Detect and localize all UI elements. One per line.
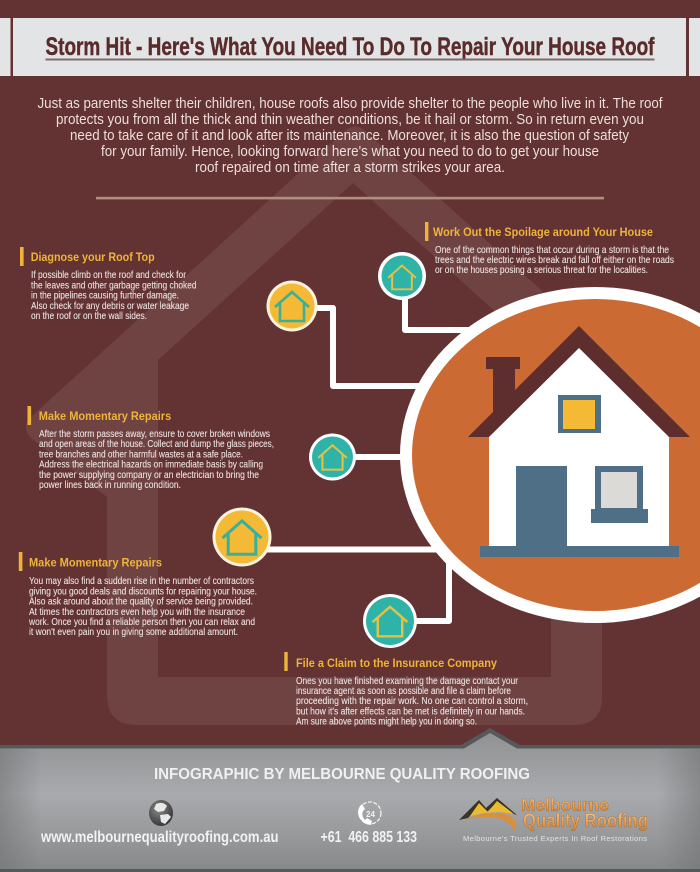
panel: make momentary repairs, second: You may also find a sudden rise in the number of contractors xyxy=(29,576,254,587)
panel: file a claim: proceeding with the repair work. No one can control a storm, xyxy=(296,696,528,707)
panel: diagnose your roof top xyxy=(20,247,197,322)
walls xyxy=(489,348,669,546)
icon: teal house top xyxy=(378,252,426,300)
panel: file a claim: but how it's after effects can be met is definitely in our hands. xyxy=(296,706,525,717)
footer heading: INFOGRAPHIC BY MELBOURNE QUALITY ROOFING xyxy=(154,766,530,783)
roof xyxy=(468,326,690,437)
intro paragraph: roof repaired on time after a storm strikes your area. xyxy=(195,159,505,176)
lower window xyxy=(595,466,643,510)
panel: make momentary repairs, second: work. Once you find a reliable person then you can relax and xyxy=(28,617,255,628)
panel: make momentary repairs, first: and open areas of the house. Collect and dump the glass pieces, xyxy=(39,439,274,450)
panel: file a claim: insurance agent as soon as possible and file a claim before xyxy=(296,686,511,697)
panel: make momentary repairs, second: it won't even pain you in giving some additional amount. xyxy=(29,627,238,638)
intro paragraph: for your family. Hence, looking forward here's what you need to do to get your house xyxy=(101,143,599,160)
panel: file a claim: Am sure above points might help you in doing so. xyxy=(296,716,477,727)
ghost house watermark xyxy=(26,126,602,725)
panel: diagnose your roof top: Also check for any debris or water leakage xyxy=(31,301,189,312)
panel: work out the spoilage: or on the houses posing a serious threat for the localities. xyxy=(435,265,648,276)
panel: make momentary repairs, second xyxy=(19,552,257,638)
panel: diagnose your roof top: in the pipelines causing further damage. xyxy=(31,291,179,302)
intro paragraph xyxy=(38,95,663,176)
logo: melbourne quality roofing: Quality Roofing xyxy=(523,811,648,832)
logo: melbourne quality roofing xyxy=(459,795,648,843)
panel: diagnose your roof top: If possible climb on the roof and check for xyxy=(31,270,186,281)
panel: file a claim: Ones you have finished examining the damage contact your xyxy=(296,676,518,687)
website: www.melbournequalityroofing.com.au xyxy=(40,829,278,846)
intro paragraph: protects you from all the thick and thin weather conditions, be it hail or storm. So in return even you xyxy=(56,111,644,128)
icon: phone 24 xyxy=(358,802,381,825)
icon: teal house middle xyxy=(309,434,356,480)
phone number: +61 466 885 133 xyxy=(320,829,417,846)
panel: make momentary repairs, first: the power supplying company or an electrician to bring the xyxy=(39,470,259,481)
icon: globe xyxy=(149,800,173,826)
icon: phone 24: 24 xyxy=(366,810,375,819)
panel: make momentary repairs, second: At times the contractors even help you with the insurance xyxy=(29,607,245,618)
panel: make momentary repairs, second: Make Momentary Repairs xyxy=(29,558,162,570)
title band xyxy=(0,18,700,76)
panel: make momentary repairs, second: Also ask around about the quality of service being provided. xyxy=(29,596,253,607)
panel: make momentary repairs, first: After the storm passes away, ensure to cover broken windows xyxy=(39,429,270,440)
panel: diagnose your roof top: the leaves and other garbage getting choked xyxy=(31,280,197,291)
chimney xyxy=(486,357,520,420)
panel: diagnose your roof top: on the roof or on the wall sides. xyxy=(31,311,147,322)
upper window xyxy=(558,395,601,433)
panel: file a claim: File a Claim to the Insurance Company xyxy=(296,658,498,670)
panel: make momentary repairs, first xyxy=(28,406,274,491)
logo: melbourne quality roofing: Melbourne's Trusted Experts In Roof Restorations xyxy=(463,834,647,843)
icon: yellow house lower xyxy=(212,508,272,566)
panel: diagnose your roof top: Diagnose your Roof Top xyxy=(31,252,155,264)
panel: make momentary repairs, first: power lines back in running condition. xyxy=(39,480,181,491)
icon: yellow house upper xyxy=(266,280,318,332)
panel: make momentary repairs, first: tree branches and other harmful wastes at a safe place. xyxy=(39,449,243,460)
door xyxy=(516,466,567,546)
panel: make momentary repairs, first: Address the electrical hazards on immediate basis by calling xyxy=(39,460,263,471)
house base xyxy=(480,546,679,557)
logo: melbourne quality roofing: Melbourne xyxy=(521,795,609,815)
footer band xyxy=(0,728,700,872)
panel: work out the spoilage xyxy=(425,222,674,276)
intro paragraph: need to take care of it and look after its maintenance. Moreover, it is also the question of safety xyxy=(70,127,629,144)
panel: make momentary repairs, second: giving you good deals and discounts for repairing your house. xyxy=(29,586,257,597)
panel: file a claim xyxy=(284,652,528,727)
panel: make momentary repairs, first: Make Momentary Repairs xyxy=(39,411,171,423)
connector lines xyxy=(265,295,470,621)
central illustration: house in orange circle xyxy=(400,287,700,623)
icon: teal house bottom xyxy=(363,594,417,648)
panel: work out the spoilage: Work Out the Spoilage around Your House xyxy=(433,227,653,239)
